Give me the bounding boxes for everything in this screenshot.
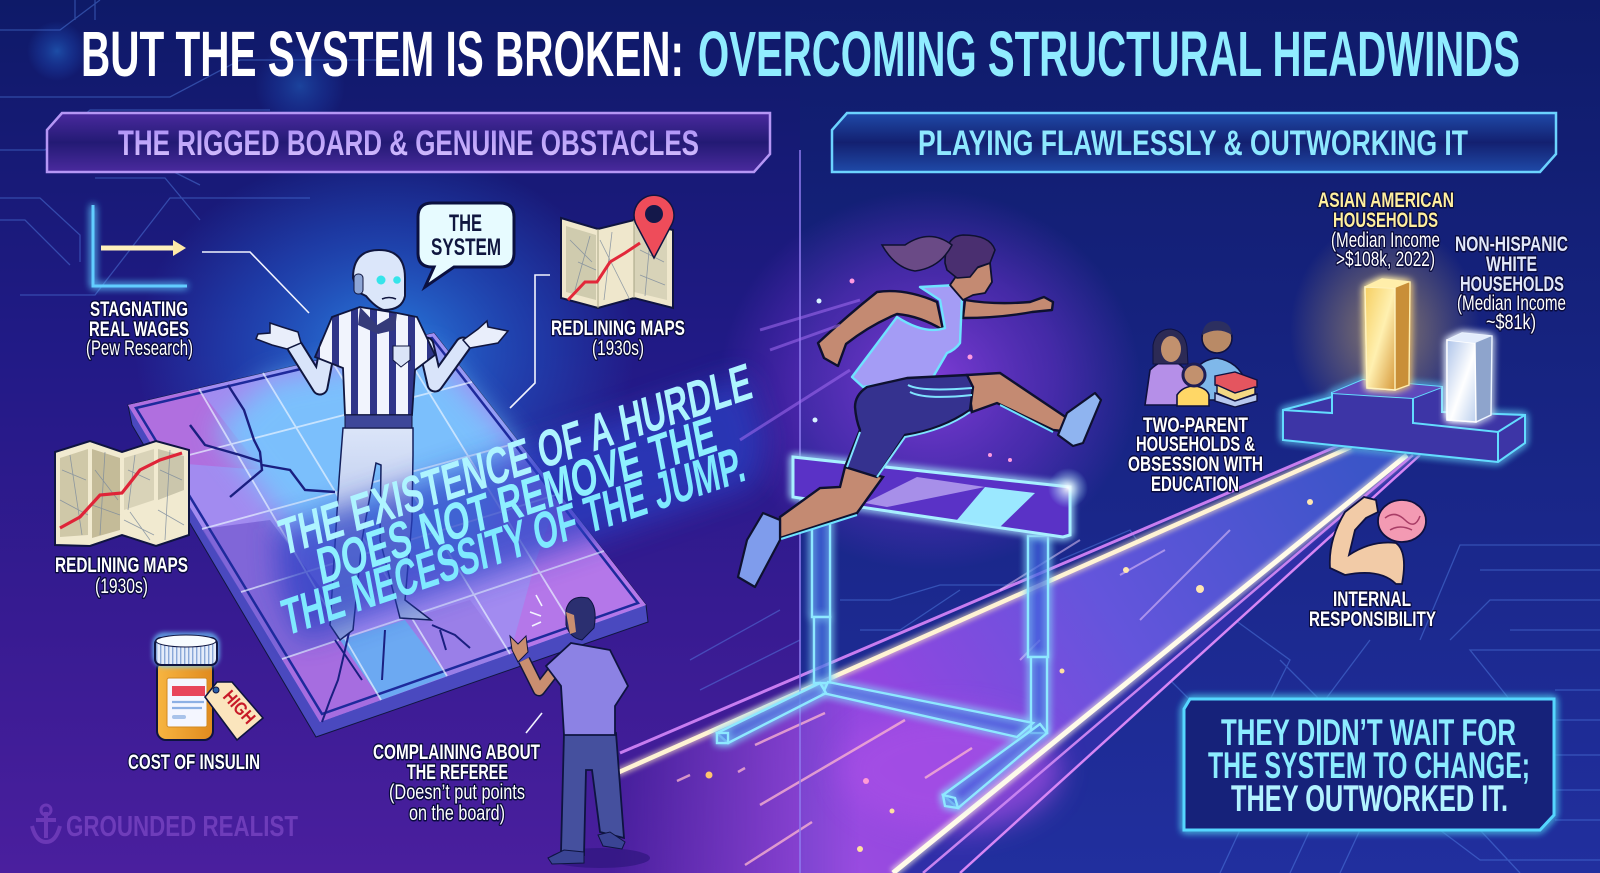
podium bbox=[1283, 380, 1525, 462]
robot hands bbox=[256, 321, 508, 349]
map pin bbox=[634, 195, 674, 258]
label: two-parent households: EDUCATION bbox=[1151, 473, 1239, 496]
connector: wages to robot bbox=[202, 252, 309, 313]
hurdle posts and base bbox=[717, 497, 1048, 808]
label: Asian American households bbox=[1318, 189, 1454, 271]
man's trousers bbox=[561, 733, 624, 855]
label: redlining maps left: (1930s) bbox=[95, 575, 148, 598]
father bbox=[1195, 358, 1247, 400]
price tag: HIGH bbox=[219, 686, 259, 728]
callout: they outworked it bbox=[1184, 699, 1554, 830]
connector: map to board bbox=[510, 275, 550, 408]
runner bbox=[738, 235, 1101, 587]
runner's neck and face bbox=[950, 263, 992, 300]
label: complaining about the referee: on the board) bbox=[409, 802, 505, 825]
ponytail bbox=[882, 236, 952, 271]
label: Asian American households: ASIAN AMERICAN bbox=[1318, 189, 1454, 212]
brain bbox=[1378, 500, 1426, 542]
eyes bbox=[376, 276, 401, 284]
books bbox=[1215, 372, 1257, 407]
label: two-parent households bbox=[1128, 414, 1263, 496]
hurdle bar bbox=[793, 457, 1070, 537]
hurdle bbox=[717, 457, 1088, 808]
label: two-parent households: TWO-PARENT bbox=[1143, 414, 1248, 437]
runner's back arm bbox=[818, 291, 943, 366]
man's head bbox=[566, 597, 595, 640]
speech bubble: the system bbox=[418, 203, 514, 287]
runner's shorts bbox=[845, 375, 973, 477]
podium chart bbox=[1283, 279, 1525, 462]
label: stagnating real wages: REAL WAGES bbox=[89, 318, 189, 341]
label: Asian American households: (Median Income bbox=[1331, 229, 1440, 252]
shirt belt bbox=[345, 415, 412, 428]
label: complaining about the referee: THE REFEREE bbox=[407, 761, 508, 784]
referee robot bbox=[256, 250, 508, 640]
banner: the rigged board: THE RIGGED BOARD & GENUINE OBSTACLES bbox=[118, 124, 699, 163]
striped shirt bbox=[315, 307, 435, 415]
icon: insulin bottle bbox=[155, 635, 263, 740]
runner's back leg bbox=[780, 467, 883, 538]
icon: redlining map left bbox=[55, 441, 189, 546]
label: stagnating real wages: (Pew Research) bbox=[86, 337, 193, 360]
pull quote on the board: THE NECESSITY OF THE JUMP. bbox=[277, 434, 749, 647]
banner: the rigged board bbox=[47, 113, 770, 172]
label: complaining about the referee bbox=[373, 741, 540, 825]
robot legs bbox=[330, 428, 431, 640]
speech bubble: the system: SYSTEM bbox=[431, 234, 501, 261]
icon: stagnating wages chart bbox=[93, 205, 187, 286]
collar bbox=[358, 307, 397, 334]
label: redlining maps top bbox=[551, 317, 685, 360]
label: cost of insulin: COST OF INSULIN bbox=[128, 751, 260, 774]
label: internal responsibility bbox=[1309, 588, 1436, 631]
child bbox=[1177, 386, 1209, 406]
runner's hair bbox=[945, 235, 995, 278]
label: redlining maps top: REDLINING MAPS bbox=[551, 317, 685, 340]
man's shadow bbox=[550, 848, 650, 868]
banner: playing flawlessly bbox=[832, 113, 1556, 172]
sparkles bbox=[740, 278, 1012, 462]
pull quote on the board: THE EXISTENCE OF A HURDLE bbox=[274, 352, 756, 567]
runner's shoes bbox=[1058, 393, 1101, 446]
label: internal responsibility: RESPONSIBILITY bbox=[1309, 608, 1436, 631]
label: non-Hispanic white households bbox=[1455, 233, 1568, 334]
label: Asian American households: HOUSEHOLDS bbox=[1333, 209, 1438, 232]
speech bubble: the system: THE bbox=[449, 210, 482, 237]
robot arms bbox=[295, 345, 463, 387]
label: internal responsibility: INTERNAL bbox=[1333, 588, 1411, 611]
runner's singlet bbox=[852, 285, 962, 387]
man's hand bbox=[510, 636, 528, 662]
complaining man bbox=[510, 595, 650, 868]
game board bbox=[128, 333, 648, 737]
label: Asian American households: >$108k, 2022) bbox=[1336, 248, 1435, 271]
label: complaining about the referee: COMPLAINING ABOUT bbox=[373, 741, 540, 764]
main title: BUT THE SYSTEM IS BROKEN: bbox=[81, 18, 684, 90]
label: stagnating real wages: STAGNATING bbox=[90, 298, 188, 321]
pull quote on the board: DOES NOT REMOVE THE bbox=[312, 405, 721, 596]
label: non-Hispanic white households: WHITE bbox=[1486, 253, 1537, 276]
man's shirt bbox=[546, 643, 628, 735]
man's shoes bbox=[548, 832, 625, 864]
main title bbox=[81, 18, 1520, 90]
watermark bbox=[32, 805, 298, 843]
label: redlining maps top: (1930s) bbox=[592, 337, 644, 360]
icon: family with books bbox=[1145, 321, 1257, 407]
man's arm bbox=[524, 660, 556, 690]
label: complaining about the referee: (Doesn’t put points bbox=[389, 781, 525, 804]
pull quote on the board bbox=[274, 352, 765, 647]
label: redlining maps left bbox=[55, 554, 188, 598]
gold bar: Asian American households bbox=[1365, 279, 1410, 390]
label: two-parent households: HOUSEHOLDS & bbox=[1136, 433, 1255, 456]
pocket bbox=[393, 346, 410, 367]
robot head bbox=[353, 250, 405, 310]
connector: man to label bbox=[526, 713, 542, 733]
ear bbox=[354, 274, 363, 294]
runner's front leg bbox=[967, 373, 1070, 432]
watermark: GROUNDED REALIST bbox=[66, 811, 298, 843]
runner's front arm bbox=[963, 297, 1053, 318]
label: redlining maps left: REDLINING MAPS bbox=[55, 554, 188, 577]
icon: redlining map top bbox=[561, 195, 674, 308]
silver bar: non-Hispanic white households bbox=[1447, 333, 1492, 422]
label: stagnating real wages bbox=[86, 298, 193, 360]
running track bbox=[620, 150, 1421, 873]
label: non-Hispanic white households: ~$81k) bbox=[1486, 311, 1536, 334]
icon: flexed arm with brain bbox=[1330, 497, 1426, 584]
mother bbox=[1145, 360, 1190, 405]
label: two-parent households: OBSESSION WITH bbox=[1128, 453, 1263, 476]
